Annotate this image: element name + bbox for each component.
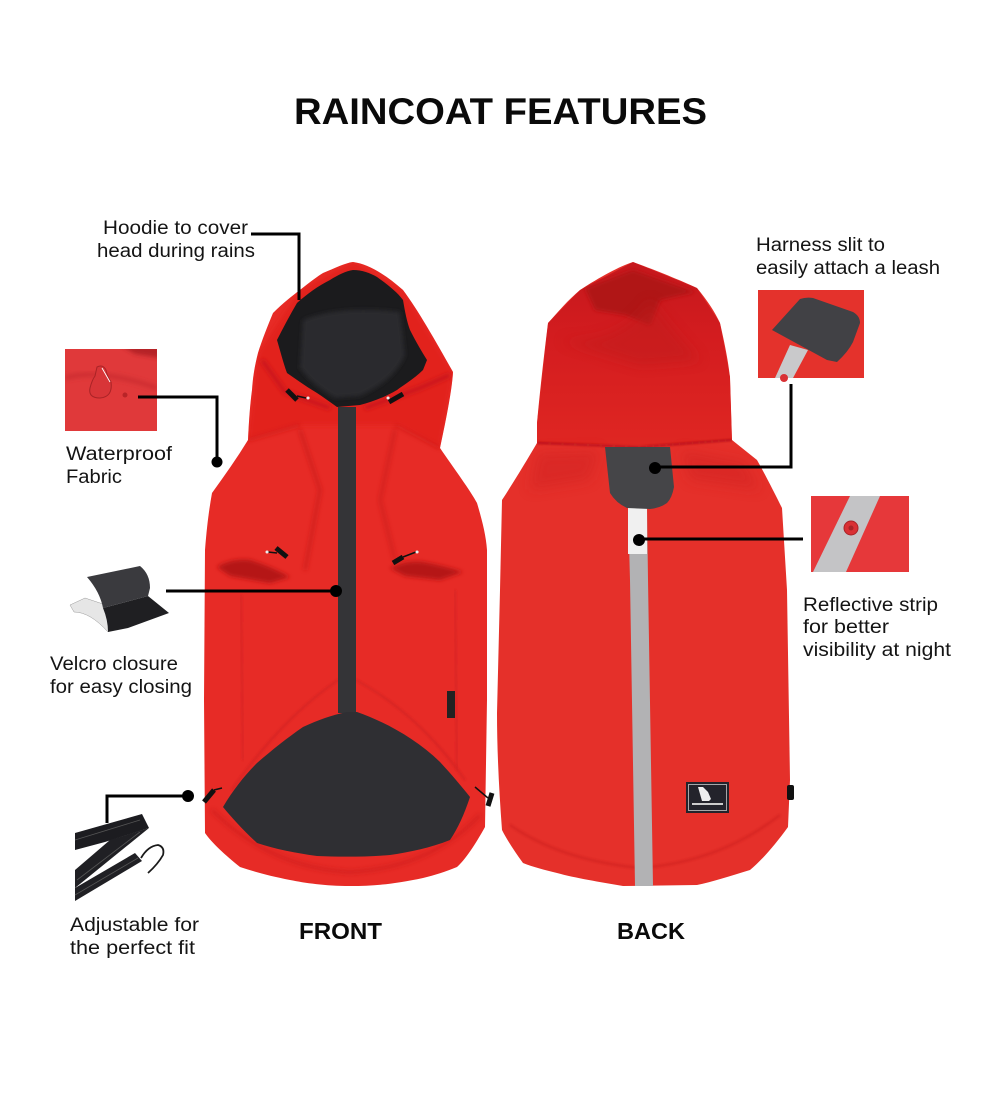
callout: hoodie (97, 218, 299, 300)
callout: waterproof fabric: Waterproof (66, 444, 173, 465)
title: RAINCOAT FEATURES (294, 91, 707, 132)
callout: harness slit (649, 235, 940, 474)
front raincoat (200, 255, 495, 895)
callout: adjustable strap (70, 790, 200, 959)
hood lining (277, 270, 427, 407)
callout: reflective strip: for better (803, 617, 890, 638)
callout: waterproof fabric: Fabric (66, 467, 122, 488)
icon: water drop on fabric (65, 345, 160, 431)
callout: reflective strip: Reflective strip (803, 595, 938, 616)
icon: drawstring strap (75, 814, 163, 901)
callout: reflective strip: visibility at night (803, 640, 952, 661)
icon: velcro strip (70, 566, 169, 632)
back coat body (495, 255, 795, 895)
front coat body (200, 255, 495, 895)
callout: adjustable strap: the perfect fit (70, 938, 196, 959)
callout: velcro closure (50, 566, 342, 698)
callout: harness slit: Harness slit to (756, 235, 885, 256)
callout: velcro closure: Velcro closure (50, 654, 178, 675)
label: front: FRONT (299, 918, 382, 944)
callout: hoodie: head during rains (97, 241, 255, 262)
callout: reflective strip (633, 496, 952, 661)
callout: hoodie: Hoodie to cover (103, 218, 249, 239)
toggles (204, 390, 492, 806)
brand label (686, 782, 729, 813)
callout: adjustable strap: Adjustable for (70, 915, 200, 936)
side toggle (787, 785, 794, 800)
harness slit patch (605, 447, 674, 509)
icon: reflective strip closeup (811, 496, 909, 572)
callout: harness slit: easily attach a leash (756, 258, 940, 279)
callout: waterproof fabric (65, 345, 222, 488)
zipper placket (338, 407, 356, 713)
callout: velcro closure: for easy closing (50, 677, 192, 698)
side tag (447, 691, 455, 718)
label: back: BACK (617, 918, 685, 944)
reflective strip (628, 505, 653, 886)
back raincoat (495, 255, 795, 895)
icon: harness slit closeup (758, 290, 864, 382)
belly panel (223, 712, 470, 857)
